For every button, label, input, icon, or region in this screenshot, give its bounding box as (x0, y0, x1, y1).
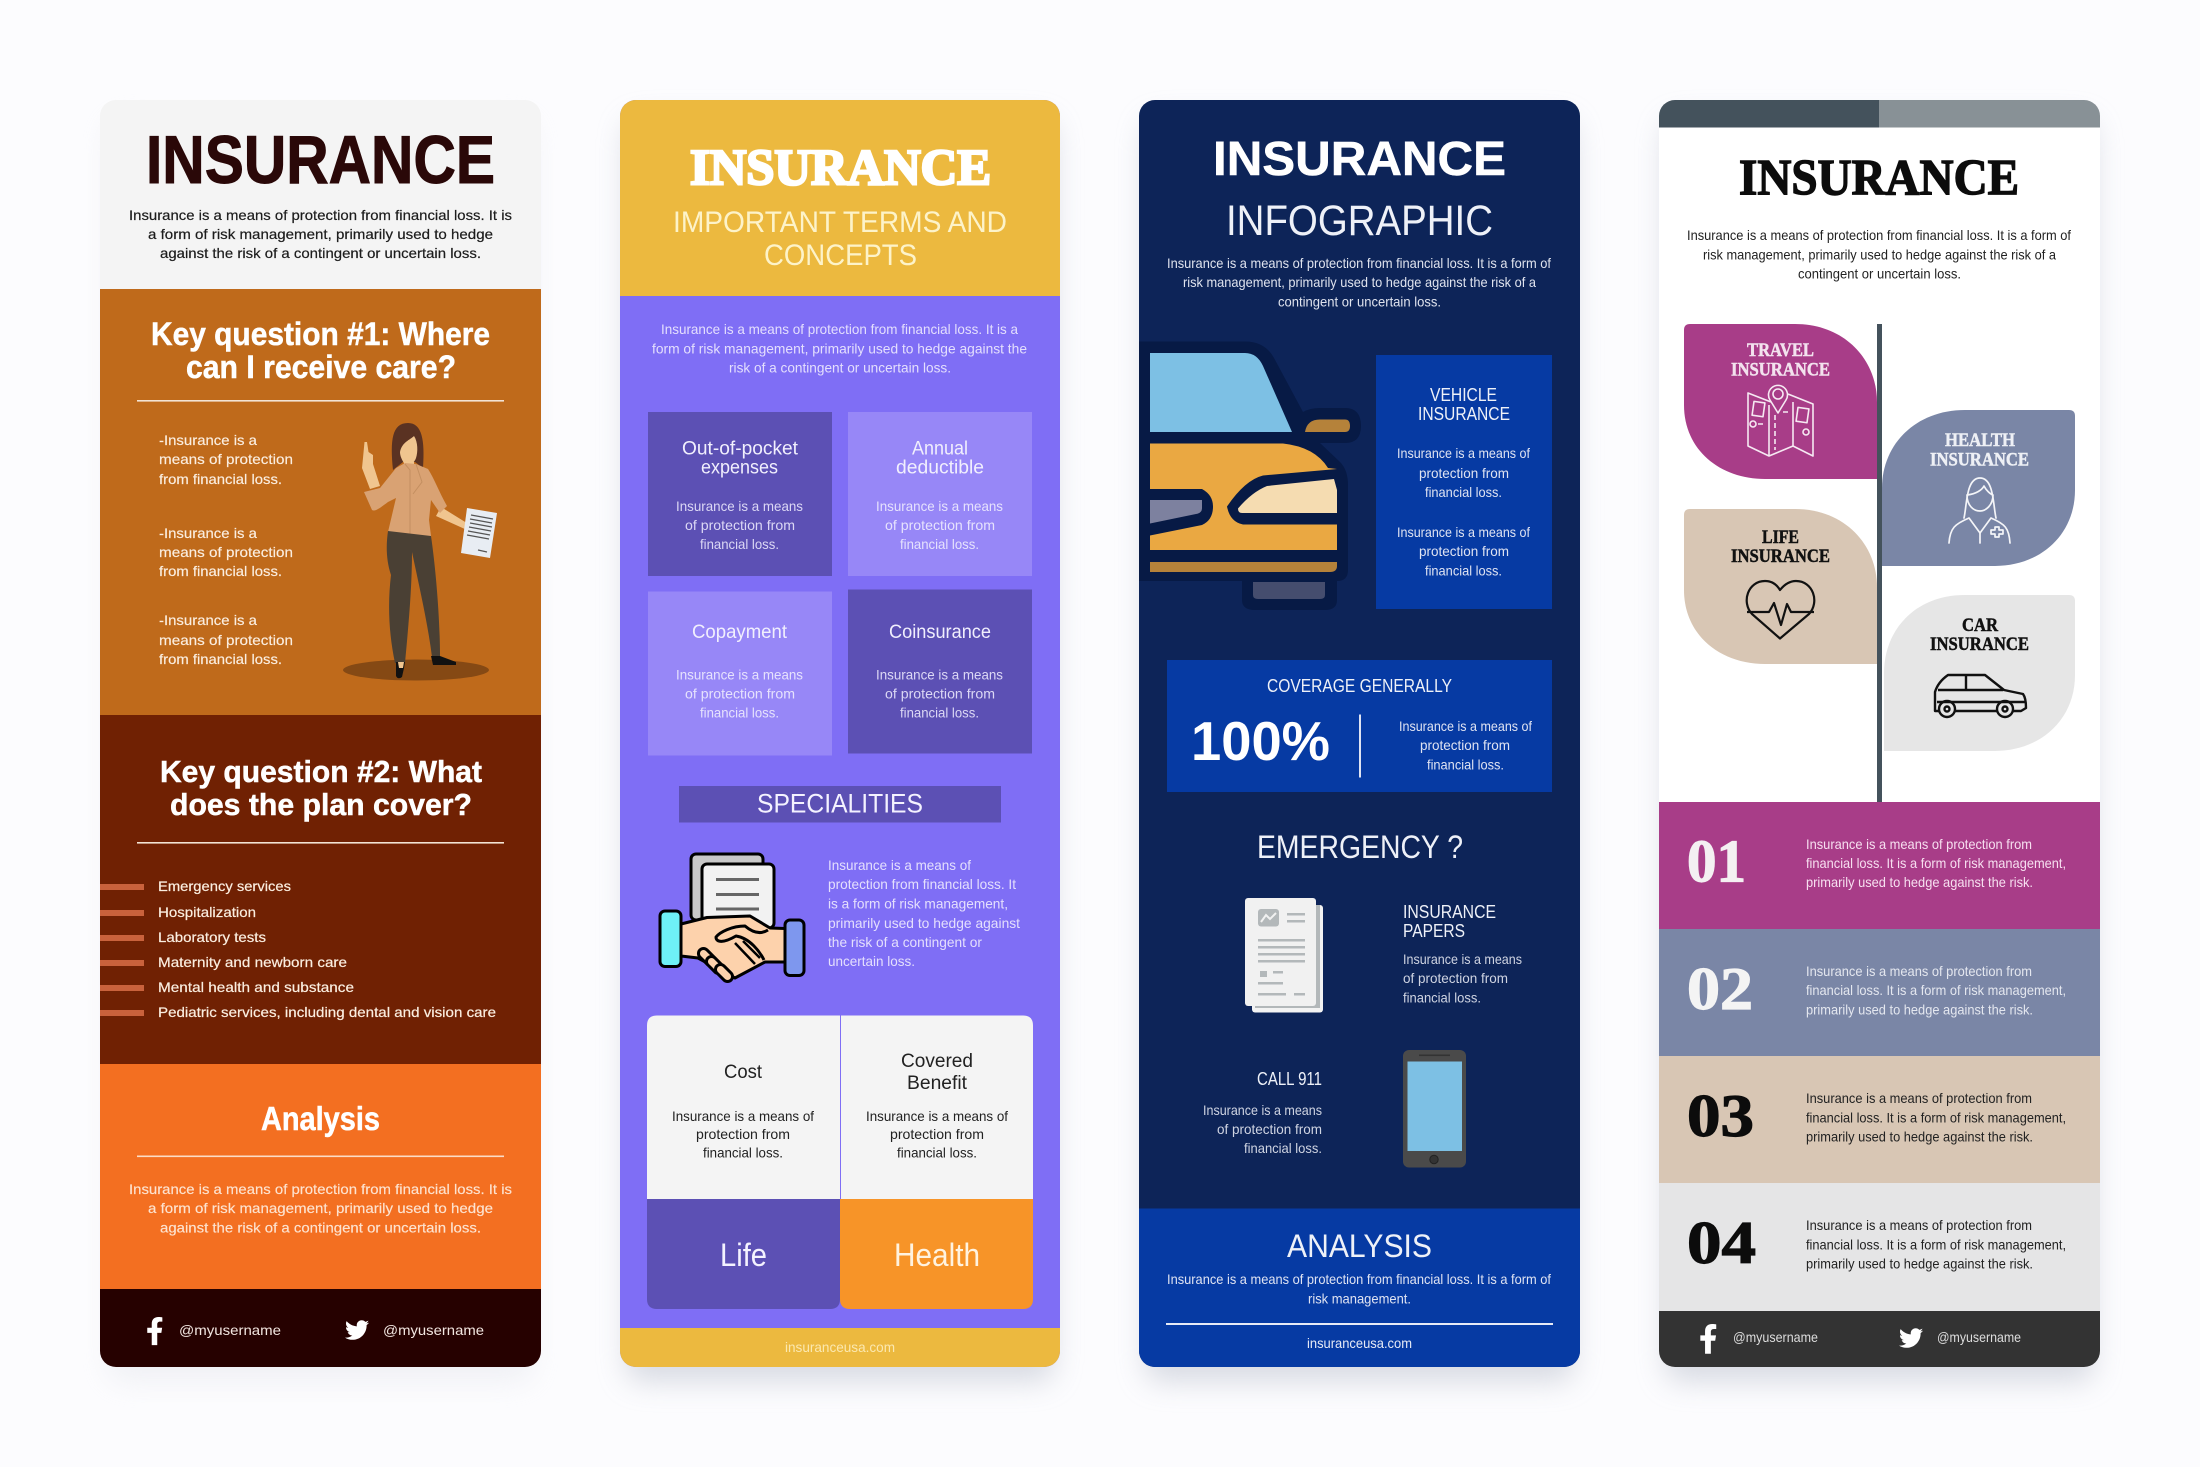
panel: navy insurance infographic (1139, 100, 1580, 1368)
specialities text: Insurance is a means of (828, 857, 971, 873)
intro text (1687, 227, 2071, 282)
text block: question 1 points: from financial loss. (159, 651, 282, 667)
social footer (1659, 1311, 2100, 1368)
card: coverage generally: COVERAGE GENERALLY (1267, 676, 1452, 696)
heading: analysis: Analysis (261, 1100, 380, 1137)
leaf: life insurance: INSURANCE (1731, 546, 1830, 567)
row: 03 (1659, 1056, 2100, 1183)
card: out-of-pocket expenses: expenses (701, 458, 778, 478)
title: INSURANCE (1739, 150, 2019, 206)
leaf: health insurance: HEALTH (1945, 430, 2015, 451)
leaf: car insurance: INSURANCE (1930, 634, 2029, 655)
card: covered benefit and health: Benefit (907, 1073, 968, 1094)
icon: map with pin (1748, 385, 1813, 456)
card: vehicle insurance: Insurance is a means of (1397, 445, 1530, 461)
specialities text: primarily used to hedge against (828, 915, 1020, 931)
icon: woman holding document (343, 423, 497, 680)
social footer: @myusername (1733, 1329, 1818, 1345)
analysis text (1167, 1271, 1551, 1306)
specialities text (828, 857, 1020, 969)
card: coinsurance: Coinsurance (889, 622, 991, 643)
text block: question 1 points: from financial loss. (159, 563, 282, 579)
card: vehicle insurance (1376, 355, 1552, 609)
row: 03: financial loss. It is a form of risk management, (1806, 1110, 2066, 1126)
icon: phone (1403, 1050, 1466, 1168)
analysis text (129, 1181, 512, 1236)
row: 03: primarily used to hedge against the risk. (1806, 1128, 2033, 1144)
subtitle: CONCEPTS (764, 239, 917, 272)
text block: question 1 points: means of protection (159, 632, 293, 648)
card: out-of-pocket expenses: financial loss. (700, 536, 779, 552)
card: annual deductible (848, 412, 1032, 576)
row: 02: Insurance is a means of protection from (1806, 963, 2032, 979)
list: coverage items with bars: Emergency services (158, 878, 291, 894)
card: covered benefit and health: financial loss. (897, 1144, 977, 1160)
card: coverage generally: Insurance is a means of (1399, 718, 1532, 734)
heading: key question 1: can I receive care? (186, 349, 456, 385)
analysis text: Insurance is a means of protection from financial loss. It is a form of (1167, 1271, 1551, 1287)
icon: doctor (1949, 478, 2010, 543)
text block: call 911: of protection from (1217, 1121, 1322, 1137)
text block: insurance papers: Insurance is a means (1403, 951, 1522, 967)
card: annual deductible: Annual (912, 438, 968, 460)
list: coverage items with bars: Mental health and substance (158, 979, 354, 995)
intro text: contingent or uncertain loss. (1278, 294, 1441, 310)
text block: call 911: financial loss. (1244, 1140, 1322, 1156)
footer url: insuranceusa.com (785, 1339, 895, 1355)
card: cost and life: protection from (696, 1126, 790, 1142)
intro text: Insurance is a means of protection from financial loss. It is a form of (1167, 255, 1551, 271)
leaf: travel insurance: INSURANCE (1731, 360, 1830, 380)
title: INSURANCE (1213, 133, 1506, 186)
card: coinsurance (848, 590, 1032, 754)
card: coinsurance: of protection from (885, 686, 995, 702)
card: annual deductible: Insurance is a means (876, 498, 1003, 514)
card: copayment: Insurance is a means (676, 666, 803, 682)
footer url: insuranceusa.com (1307, 1335, 1412, 1351)
text block: insurance papers: financial loss. (1403, 990, 1481, 1006)
specialities text: uncertain loss. (828, 953, 915, 969)
leaf: health insurance: INSURANCE (1930, 450, 2029, 470)
heading: key question 1: Key question #1: Where (151, 316, 490, 352)
row: 02: primarily used to hedge against the risk. (1806, 1002, 2033, 1018)
text block: insurance papers: PAPERS (1403, 921, 1465, 941)
analysis text: against the risk of a contingent or uncertain loss. (160, 1220, 481, 1236)
heading: specialities (679, 786, 1001, 822)
icon: car outline (1935, 675, 2026, 717)
card: vehicle insurance: financial loss. (1425, 484, 1502, 500)
card: vehicle insurance: protection from (1419, 543, 1509, 559)
text block: question 1 points: -Insurance is a (159, 432, 257, 448)
subtitle (676, 211, 1006, 266)
card: copayment: Copayment (692, 622, 788, 643)
text block: insurance papers: INSURANCE (1403, 902, 1496, 922)
row: 03: 03 (1687, 1083, 1754, 1149)
intro text: a form of risk management, primarily used to hedge (148, 226, 493, 242)
intro text: risk management, primarily used to hedge against the risk of a (1703, 246, 2056, 262)
row: 02: 02 (1687, 956, 1753, 1022)
intro text: Insurance is a means of protection from financial loss. It is a (661, 321, 1018, 337)
intro text (1167, 255, 1551, 310)
specialities text: is a form of risk management, (828, 896, 1008, 912)
icon: insurance papers (1245, 898, 1323, 1012)
card: out-of-pocket expenses (648, 412, 832, 576)
card: vehicle insurance: INSURANCE (1418, 404, 1510, 424)
text block: question 1 points: means of protection (159, 451, 293, 467)
row: 02: financial loss. It is a form of risk management, (1806, 982, 2066, 998)
text block: call 911: Insurance is a means (1203, 1102, 1322, 1118)
card: out-of-pocket expenses: Insurance is a means (676, 498, 803, 514)
text block: question 1 points: -Insurance is a (159, 612, 257, 628)
analysis text: a form of risk management, primarily used to hedge (148, 1200, 493, 1216)
row: 01 (1659, 802, 2100, 929)
row: 02 (1659, 929, 2100, 1056)
leaf: car insurance: CAR (1962, 615, 1998, 636)
row: 01: financial loss. It is a form of risk management, (1806, 855, 2066, 871)
social footer (147, 1317, 484, 1345)
heading: specialities: SPECIALITIES (757, 788, 923, 818)
card: cost and life: Life (720, 1237, 767, 1273)
card: covered benefit and health: Health (894, 1237, 980, 1273)
list: coverage items with bars: Hospitalization (158, 904, 256, 920)
card: out-of-pocket expenses: of protection from (685, 517, 795, 533)
text block: call 911 (1203, 1069, 1322, 1156)
list: coverage items with bars: Laboratory tests (158, 929, 266, 945)
text block: insurance papers (1403, 902, 1522, 1006)
card: annual deductible: financial loss. (900, 536, 979, 552)
heading: emergency: EMERGENCY ? (1257, 829, 1463, 865)
intro text: against the risk of a contingent or uncertain loss. (160, 245, 481, 261)
card: copayment: financial loss. (700, 704, 779, 720)
card: cost and life: Cost (724, 1062, 763, 1083)
text block: question 1 points: -Insurance is a (159, 525, 257, 541)
card: cost and life: financial loss. (703, 1144, 783, 1160)
text block: insurance papers: of protection from (1403, 970, 1508, 986)
analysis text: Insurance is a means of protection from financial loss. It is (129, 1181, 512, 1197)
row: 01: 01 (1687, 828, 1746, 894)
list: coverage items with bars: Pediatric services, including dental and vision care (158, 1004, 496, 1020)
row: 04: 04 (1687, 1210, 1756, 1276)
title: INSURANCE (146, 122, 495, 198)
heading: key question 1 (152, 321, 490, 378)
heading: key question 2 (160, 754, 482, 822)
intro text: Insurance is a means of protection from financial loss. It is a form of (1687, 227, 2071, 243)
specialities text: the risk of a contingent or (828, 934, 982, 950)
text block: call 911: CALL 911 (1257, 1069, 1322, 1089)
leaf: life insurance (1684, 509, 1877, 664)
subtitle: IMPORTANT TERMS AND (673, 206, 1007, 239)
card: cost and life: Insurance is a means of (672, 1108, 814, 1124)
leaf: health insurance (1882, 410, 2075, 566)
card: coverage generally: financial loss. (1427, 756, 1504, 772)
card: coinsurance: financial loss. (900, 704, 979, 720)
text block: question 1 points (159, 432, 293, 667)
card: vehicle insurance: VEHICLE (1430, 385, 1497, 405)
row: 01: Insurance is a means of protection from (1806, 836, 2032, 852)
intro text (652, 321, 1027, 376)
card: copayment (648, 592, 832, 756)
card: coverage generally: 100% (1191, 710, 1330, 772)
specialities text: protection from financial loss. It (828, 876, 1016, 892)
intro text: risk management, primarily used to hedge against the risk of a (1183, 274, 1536, 290)
heading: key question 2: Key question #2: What (160, 754, 482, 789)
text block: question 1 points: from financial loss. (159, 471, 282, 487)
text block: question 1 points: means of protection (159, 544, 293, 560)
panel: orange insurance infographic (100, 100, 541, 1368)
card: out-of-pocket expenses: Out-of-pocket (682, 438, 799, 460)
title: INSURANCE (690, 140, 991, 196)
card: covered benefit and health: protection from (890, 1126, 984, 1142)
icon: heart with pulse (1747, 581, 1814, 638)
social footer: @myusername (383, 1322, 484, 1338)
card: copayment: of protection from (685, 686, 795, 702)
intro text: Insurance is a means of protection from financial loss. It is (129, 207, 512, 223)
card: coinsurance: Insurance is a means (876, 666, 1003, 682)
heading: key question 2: does the plan cover? (170, 787, 472, 822)
intro text: form of risk management, primarily used to hedge against the (652, 340, 1027, 356)
row: 04: financial loss. It is a form of risk management, (1806, 1236, 2066, 1252)
panel: white and magenta insurance infographic (1659, 100, 2100, 1368)
intro text: contingent or uncertain loss. (1798, 266, 1961, 282)
card: covered benefit and health (840, 1016, 1033, 1309)
leaf: life insurance: LIFE (1762, 527, 1799, 548)
card: annual deductible: of protection from (885, 517, 995, 533)
card: covered benefit and health: Insurance is a means of (866, 1108, 1008, 1124)
card: covered benefit and health: Covered (901, 1051, 973, 1072)
row: 04: primarily used to hedge against the risk. (1806, 1256, 2033, 1272)
leaf: travel insurance (1684, 324, 1877, 479)
list: coverage items with bars: Maternity and newborn care (158, 954, 347, 970)
card: vehicle insurance: Insurance is a means of (1397, 524, 1530, 540)
leaf: travel insurance: TRAVEL (1747, 340, 1814, 361)
card: coverage generally: protection from (1420, 737, 1510, 753)
social footer: @myusername (179, 1322, 281, 1338)
leaf: car insurance (1884, 595, 2075, 751)
card: coverage generally (1167, 660, 1552, 792)
icon: handshake over documents (660, 854, 804, 984)
header bar (1659, 100, 2100, 128)
list: coverage items with bars (100, 878, 496, 1020)
card: annual deductible: deductible (896, 458, 984, 478)
card: cost and life (647, 1016, 840, 1309)
row: 01: primarily used to hedge against the risk. (1806, 874, 2033, 890)
card: vehicle insurance: financial loss. (1425, 562, 1502, 578)
intro text (129, 207, 512, 261)
analysis text: risk management. (1308, 1290, 1411, 1306)
icon: car front (1139, 342, 1361, 610)
row: 04 (1659, 1183, 2100, 1311)
social footer: @myusername (1937, 1329, 2021, 1345)
intro text: risk of a contingent or uncertain loss. (729, 360, 951, 376)
row: 03: Insurance is a means of protection from (1806, 1090, 2032, 1106)
panel: purple important terms infographic (620, 100, 1060, 1368)
card: vehicle insurance: protection from (1419, 465, 1509, 481)
row: 04: Insurance is a means of protection from (1806, 1217, 2032, 1233)
subtitle: INFOGRAPHIC (1226, 197, 1493, 245)
heading: analysis: ANALYSIS (1287, 1228, 1432, 1264)
